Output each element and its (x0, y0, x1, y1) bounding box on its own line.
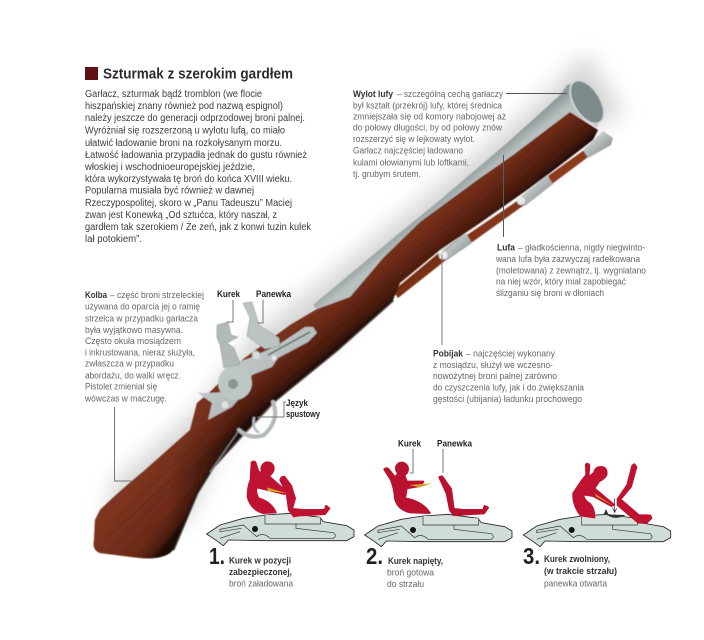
callout: lufa (495, 242, 646, 299)
title (85, 66, 293, 82)
lock cut-out (268, 332, 310, 355)
stock lower shadow (173, 300, 393, 550)
callout: wylot lufy: – szczególną cechą garłaczy (397, 89, 503, 100)
callout: lufa: Lufa (497, 242, 516, 253)
callout: wylot lufy: Wylot lufy (353, 89, 394, 100)
intro text: ułatwić ładowanie broni na rozkołysanym morzu. (85, 138, 282, 149)
callout: kolba: strzelca w przypadku garłacza (85, 313, 199, 324)
step 3 caption: (w trakcie strzału) (544, 566, 617, 577)
intro text: która wykorzystywała tę broń do końca XVIII wieku. (85, 174, 292, 185)
intro text: zwan jest Konewką „Od sztućca, który naszał, z (85, 210, 277, 221)
callout: pobijak: do czyszczenia lufy, jak i do zwiększania (433, 382, 585, 393)
leader: panewka (258, 300, 263, 323)
wood grain (105, 135, 570, 540)
lock plate (365, 514, 512, 547)
label: kurek step 2: Kurek (398, 439, 422, 450)
callout: pobijak (433, 349, 585, 405)
trigger guard (239, 402, 275, 437)
label: język spustowy: Język (286, 398, 309, 409)
callout: kolba: wówczas w maczugę. (84, 393, 167, 404)
callout: lufa: – gładkościenna, nigdy niegwinto- (518, 242, 645, 253)
callout: lufa: ślizganiu się broni w dłoniach (496, 288, 604, 299)
callout: lufa: na niej wzór, który miał zapobiegać (496, 277, 626, 288)
label: panewka: Panewka (256, 289, 292, 300)
arrow (613, 498, 617, 512)
leader: kolba (114, 407, 133, 481)
hammer (384, 462, 430, 513)
ramrod (393, 131, 613, 298)
step 1 caption: broń załadowana (229, 579, 294, 590)
callout: wylot lufy: zmniejszała się od komory nabojowej aż (353, 112, 506, 123)
callout: kolba: i inkrustowana, nieraz służyła, (85, 348, 195, 359)
callout: pobijak: nowożytnej broni palnej zarówno (433, 371, 557, 382)
callout: pobijak: z mosiądzu, służył we wczesno- (433, 360, 553, 371)
gun shadow (106, 56, 625, 524)
step 3 hammer and frizzen (573, 464, 651, 523)
callout: wylot lufy (353, 89, 506, 180)
barrel (313, 82, 600, 309)
intro text: hiszpańskiej znany również pod nazwą espignol) (85, 101, 283, 112)
intro text: włoskiej i wschodnioeuropejskiej jeździe, (84, 162, 255, 173)
tumbler disk (218, 366, 252, 400)
muzzle opening (563, 75, 611, 129)
flintlock mechanism (198, 302, 317, 420)
leader: pobijak (441, 255, 443, 345)
callout: pobijak: gęstości (ubijania) ładunku prochowego (433, 394, 582, 405)
intro text: gardłem tak szerokiem / Że zeń, jak z konwi tuzin kulek (85, 220, 312, 233)
callout: wylot lufy: rozszerzyć się w lejkowaty wylot. (353, 134, 475, 145)
intro text: Popularna musiała być również w dawnej (85, 186, 254, 196)
callout: kolba: Kolba (85, 290, 108, 301)
leader: lufa (502, 155, 504, 237)
callout: lufa: (moletowana) z zewnątrz, tj. wygniatano (496, 265, 646, 276)
callout: kolba: Pistolet zmieniał się (85, 382, 157, 393)
flint (594, 493, 614, 506)
intro text: Wyróżniał się rozszerzoną u wylotu lufą, co miało (85, 126, 285, 136)
hammer (573, 464, 614, 517)
title marker (85, 67, 98, 80)
lock plate (523, 510, 671, 547)
step 3 number: 3. (523, 543, 540, 569)
title text: Szturmak z szerokim gardłem (103, 66, 293, 82)
lock plate (198, 327, 317, 420)
intro text: Garłacz, szturmak bądź tromblon (we flocie (85, 89, 262, 100)
label: język spustowy: spustowy (286, 409, 321, 420)
intro text (84, 89, 312, 245)
butt plate strip (210, 432, 238, 472)
frizzen (618, 464, 651, 523)
musket (94, 75, 613, 558)
butt shading (93, 400, 246, 559)
leader: kurek (227, 300, 233, 322)
flint (267, 487, 287, 493)
wooden stock (94, 112, 598, 558)
step 1 number: 1. (209, 543, 225, 569)
step 1 caption (229, 556, 294, 590)
label: język spustowy (286, 398, 321, 420)
callout: wylot lufy: do połowy długości, by od połowy znów (353, 123, 502, 134)
callout: kolba: – część broni strzeleckiej (110, 290, 204, 301)
intro text: lał potokiem”. (85, 234, 142, 245)
step 2 number: 2. (366, 543, 383, 569)
callout: wylot lufy: kulami ołowianymi lub loftkami, (353, 157, 469, 168)
callout: wylot lufy: tj. grubym śrutem. (353, 169, 421, 180)
step 2 caption: Kurek napięty, (388, 556, 443, 567)
step 3 diagram (523, 510, 671, 547)
step 3 caption: panewka otwarta (544, 579, 608, 590)
step 1 caption: zabezpieczonej, (229, 567, 292, 578)
step 3 caption: Kurek zwolniony, (544, 554, 610, 565)
callout: pobijak: Pobijak (433, 349, 464, 360)
step 2 caption: do strzału (387, 579, 424, 590)
callout: kolba: Często okuła mosiądzem (85, 336, 181, 347)
step 3 caption (544, 554, 617, 590)
leader: język spustowy (257, 402, 286, 417)
intro text: Rzeczypospolitej, skoro w „Panu Tadeuszu” Maciej (85, 198, 292, 209)
frizzen (439, 476, 488, 515)
intro text: należy jeszcze do generacji odprzodowej broni palnej. (85, 113, 305, 124)
callout: lufa: wana lufa była zazwyczaj radełkowana (495, 254, 641, 265)
callout: kolba: była wyjątkowo masywna. (85, 325, 183, 336)
intro text: Łatwość ładowania przypadła jednak do gustu również (85, 150, 307, 161)
callout: kolba: zwłaszcza w przypadku (85, 359, 174, 370)
leader: wylot lufy (506, 92, 567, 94)
frizzen (243, 302, 280, 349)
hammer (248, 461, 287, 513)
leader: kurek step 2 (410, 449, 413, 473)
callout: wylot lufy: Garłacz najczęściej ładowano (353, 146, 463, 157)
step 1 diagram (207, 461, 354, 546)
step 2 hammer and frizzen (384, 462, 488, 515)
step 1 caption: Kurek w pozycji (229, 556, 291, 566)
callout: kolba: używana do oparcia jej o ramię (85, 302, 200, 313)
flint (409, 483, 432, 487)
label: panewka step 2: Panewka (437, 439, 473, 450)
step 2 caption (387, 556, 443, 590)
callout: pobijak: – najczęściej wykonany (466, 349, 555, 360)
frizzen (280, 477, 329, 516)
label: kurek: Kurek (217, 289, 241, 300)
lock plate (207, 513, 354, 546)
callout: kolba: abordażu, do walki wręcz. (85, 370, 181, 381)
step 2 diagram (365, 514, 512, 547)
callout: kolba (84, 290, 204, 404)
callout: wylot lufy: był kształt (przekrój) lufy, której średnica (353, 100, 503, 111)
step 2 caption: broń gotowa (387, 568, 435, 579)
leader: panewka step 2 (442, 449, 444, 473)
cock (217, 322, 240, 368)
